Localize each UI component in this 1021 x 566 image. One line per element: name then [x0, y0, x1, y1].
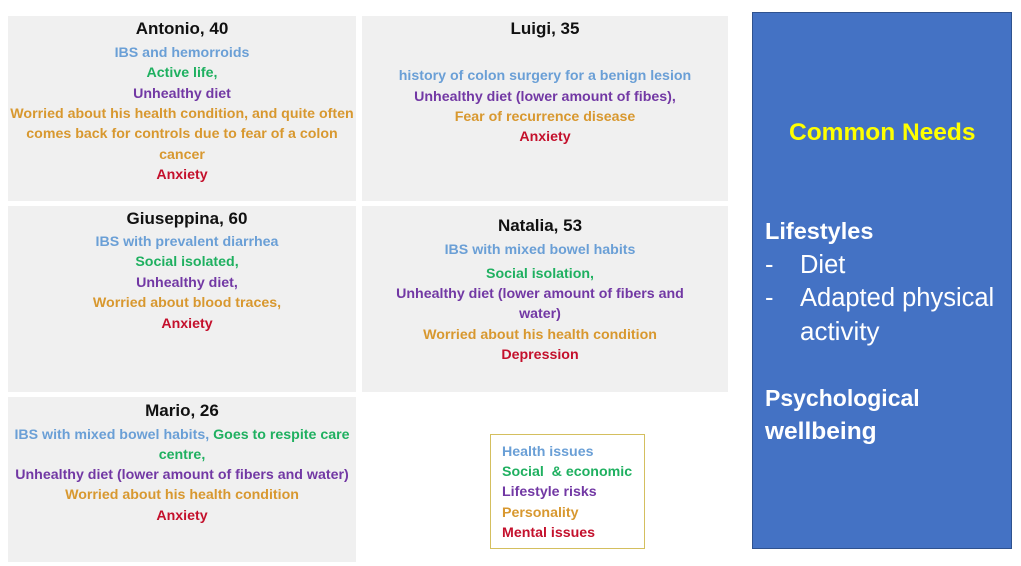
legend: mental issues: Mental issues [502, 525, 595, 541]
health issue: history of colon surgery for a benign lesion [399, 68, 691, 84]
personality: Fear of recurrence disease [455, 109, 635, 125]
panel: Luigi [362, 16, 728, 201]
lifestyle risk: Unhealthy diet (lower amount of fibes), [414, 89, 676, 105]
social factor: Social isolation, [486, 266, 594, 282]
personality continued: comes back for controls due to fear of a colon [26, 126, 338, 142]
heading: Antonio: Antonio, 40 [136, 19, 228, 38]
mental issue: Depression [501, 347, 579, 363]
health issue: IBS with prevalent diarrhea [96, 234, 278, 250]
mental issue: Anxiety [156, 167, 208, 183]
heading: Giuseppina: Giuseppina, 60 [127, 209, 247, 228]
personality: Worried about his health condition [65, 487, 299, 503]
legend: health issues: Health issues [502, 444, 593, 460]
subheading: psychological wellbeing: Psychological [765, 385, 920, 411]
list text: diet: Diet [800, 251, 845, 279]
subheading: lifestyles: Lifestyles [765, 218, 873, 244]
panel: common needs [752, 12, 1012, 549]
mental issue: Anxiety [156, 508, 208, 524]
panel: Giuseppina [8, 206, 356, 392]
lifestyle risk continued: water) [519, 306, 561, 322]
legend: personality: Personality [502, 505, 578, 521]
personality: Worried about his health condition, and quite often [10, 106, 354, 122]
personality continued: cancer [159, 147, 205, 163]
lifestyle risk: Unhealthy diet (lower amount of fibers and water) [15, 467, 349, 483]
list item: physical activity: - [765, 284, 774, 312]
personality: Worried about his health condition [423, 327, 657, 343]
panel: Natalia [362, 206, 728, 392]
legend: lifestyle risks: Lifestyle risks [502, 484, 597, 500]
mental issue: Anxiety [519, 129, 571, 145]
list text continued: activity [800, 316, 879, 346]
legend: social and economic: Social & economic [502, 464, 632, 480]
social factor: Social isolated, [135, 254, 239, 270]
lifestyle risk: Unhealthy diet (lower amount of fibers and [396, 286, 684, 302]
heading: Natalia: Natalia, 53 [498, 216, 582, 235]
social factor: Active life, [147, 65, 217, 81]
list text: physical activity: Adapted physical [800, 284, 994, 312]
heading: common needs: Common Needs [789, 119, 976, 146]
lifestyle risk: Unhealthy diet, [136, 275, 238, 291]
heading: Mario: Mario, 26 [145, 401, 219, 420]
list item: diet: - [765, 251, 774, 279]
health issue: IBS and hemorroids [115, 45, 249, 61]
personality: Worried about blood traces, [93, 295, 281, 311]
social continued: centre, [159, 447, 205, 463]
heading: Luigi: Luigi, 35 [511, 19, 579, 38]
health issue: IBS with mixed bowel habits [445, 242, 635, 258]
panel: Antonio [8, 16, 356, 201]
panel: Mario [8, 397, 356, 562]
lifestyle risk: Unhealthy diet [133, 86, 231, 102]
mental issue: Anxiety [161, 316, 213, 332]
health and social: IBS with mixed bowel habits, Goes to respite care [14, 427, 350, 443]
legend [490, 434, 645, 549]
subheading continued: wellbeing [765, 418, 877, 445]
